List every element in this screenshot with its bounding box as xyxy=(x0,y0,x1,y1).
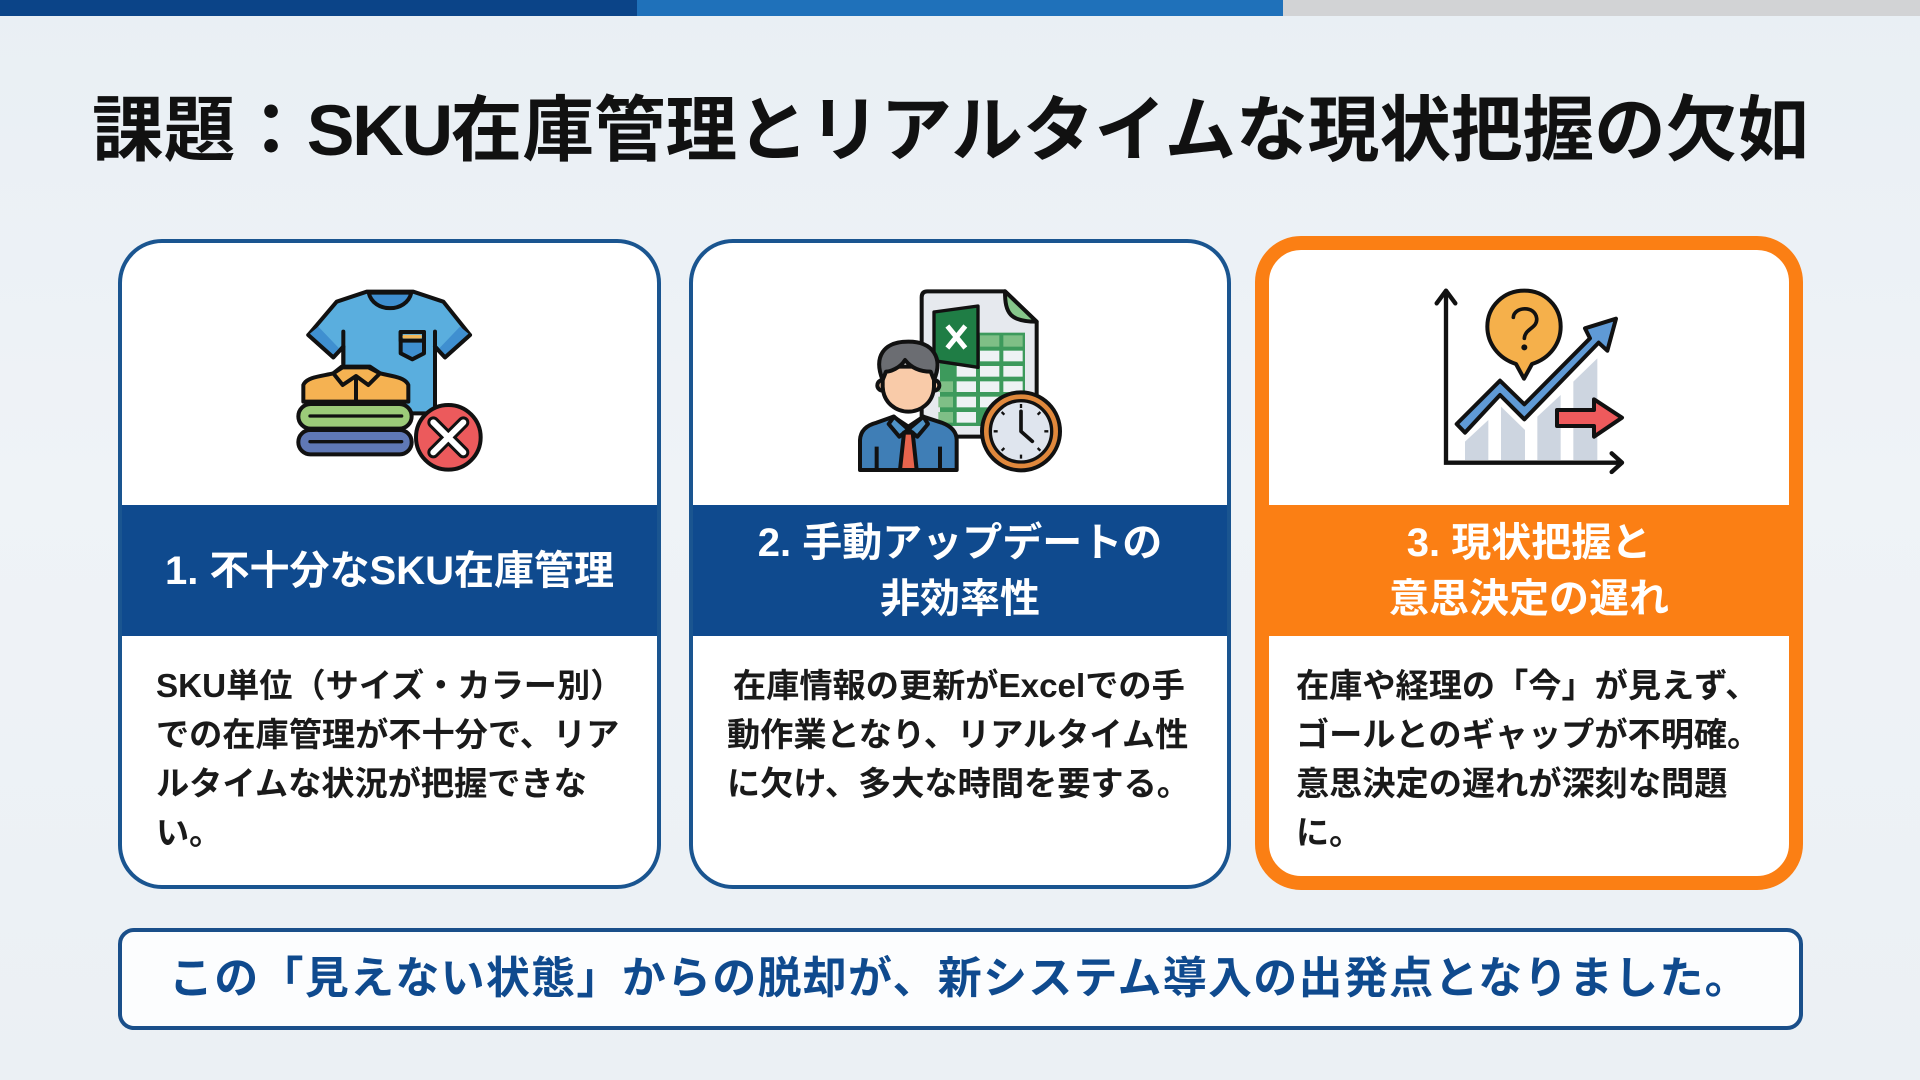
text block: card 3: 意思決定の遅れが深刻な問題 xyxy=(1296,766,1727,803)
heading: card 2: 2. 手動アップデートの xyxy=(758,521,1162,565)
callout: この「見えない状態」からの脱却が、新システム導入の出発点となりました。 xyxy=(169,954,1750,1003)
text block: card 3 xyxy=(1296,668,1760,852)
text block: card 1: い。 xyxy=(156,815,222,852)
heading: card 2 xyxy=(679,505,1241,636)
panel: card 1 xyxy=(118,239,661,889)
text block: card 1 xyxy=(156,668,623,852)
panel: card 2 xyxy=(689,239,1231,889)
heading: card 1: 1. 不十分なSKU在庫管理 xyxy=(165,549,614,593)
heading: card 3: 3. 現状把握と xyxy=(1407,521,1651,565)
title: 課題：SKU在庫管理とリアルタイムな現状把握の欠如 xyxy=(92,91,1809,171)
heading: card 1 xyxy=(108,505,671,636)
top progress bar xyxy=(0,0,1920,16)
icon: chart with question and arrows xyxy=(1434,288,1624,474)
callout xyxy=(118,928,1803,1030)
heading: card 3 xyxy=(1255,505,1803,636)
text block: card 2 xyxy=(727,668,1190,803)
text block: card 1: SKU単位（サイズ・カラー別） xyxy=(156,668,623,705)
heading: card 3: 意思決定の遅れ xyxy=(1389,577,1669,621)
text block: card 1: での在庫管理が不十分で、リア xyxy=(156,717,619,754)
text block: card 3: に。 xyxy=(1296,815,1362,852)
text block: card 2: に欠け、多大な時間を要する。 xyxy=(727,766,1190,803)
text block: card 3: 在庫や経理の「今」が見えず、 xyxy=(1296,668,1758,705)
icon: person with spreadsheet and clock xyxy=(858,289,1062,472)
text block: card 2: 在庫情報の更新がExcelでの手 xyxy=(733,668,1185,705)
icon: shirts with error mark xyxy=(296,290,483,472)
text block: card 2: 動作業となり、リアルタイム性 xyxy=(727,717,1188,754)
heading: card 2: 非効率性 xyxy=(880,577,1040,621)
text block: card 1: ルタイムな状況が把握できな xyxy=(156,766,587,803)
panel: card 3 xyxy=(1255,236,1803,890)
text block: card 3: ゴールとのギャップが不明確。 xyxy=(1296,717,1760,754)
